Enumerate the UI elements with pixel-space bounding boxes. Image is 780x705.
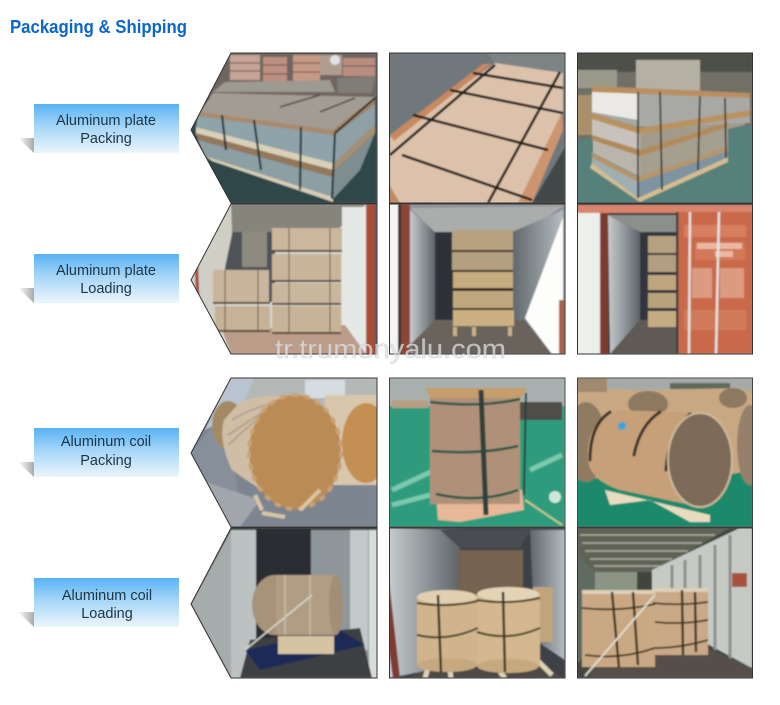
photo: upright coil on green floor [389,378,565,527]
photo: plates in container [191,204,377,354]
photo frame: coil packing 2 [390,378,565,527]
photo frame: plate loading 3 [578,204,752,354]
label: Aluminum plate Loading [18,254,179,303]
photo frame: coil loading 2 [390,528,565,678]
photo: coils lashed in container [577,528,753,678]
label: Aluminum plate Loading: Aluminum plate [56,263,156,279]
label: Aluminum plate Packing [18,104,179,153]
photo frame: coil loading 1 [191,528,377,678]
label: Aluminum plate Packing: Packing [80,131,132,147]
photo frame: coil loading 3 [578,528,752,678]
photo: horizontal coils with strapping [578,378,752,526]
photo: open orange container door [577,204,753,354]
photo: strapped plate top view [389,52,565,203]
label: Aluminum coil Packing [18,428,179,477]
photo: stacked plates in warehouse [191,52,377,203]
photo: plate stack pallets [577,52,753,203]
label: Aluminum plate Loading: Loading [80,281,132,297]
photo: coil with cardboard flaps [191,378,390,527]
photo frame: coil packing 3 [578,378,752,527]
photo: coil in container on pallet [191,528,377,678]
photo frame: plate packing 1 [191,53,377,203]
photo: two upright coils in container [389,528,565,678]
label: Aluminum coil Loading: Loading [81,606,133,622]
photo: container with plate stack [389,204,565,354]
label: Aluminum coil Loading [18,578,179,627]
title: Packaging & Shipping [10,16,187,37]
label: Aluminum plate Packing: Aluminum plate [56,113,156,129]
photo frame: plate packing 3 [578,53,752,203]
label: Aluminum coil Packing: Aluminum coil [61,434,151,450]
label: Aluminum coil Loading: Aluminum coil [62,588,152,604]
label: Aluminum coil Packing: Packing [80,453,132,469]
watermark: tr.trumonyalu.com [275,334,506,364]
photo frame: plate loading 1 [191,204,377,354]
photo frame: coil packing 1 [191,378,377,527]
photo frame: plate packing 2 [390,53,565,203]
photo frame: plate loading 2 [390,204,565,354]
